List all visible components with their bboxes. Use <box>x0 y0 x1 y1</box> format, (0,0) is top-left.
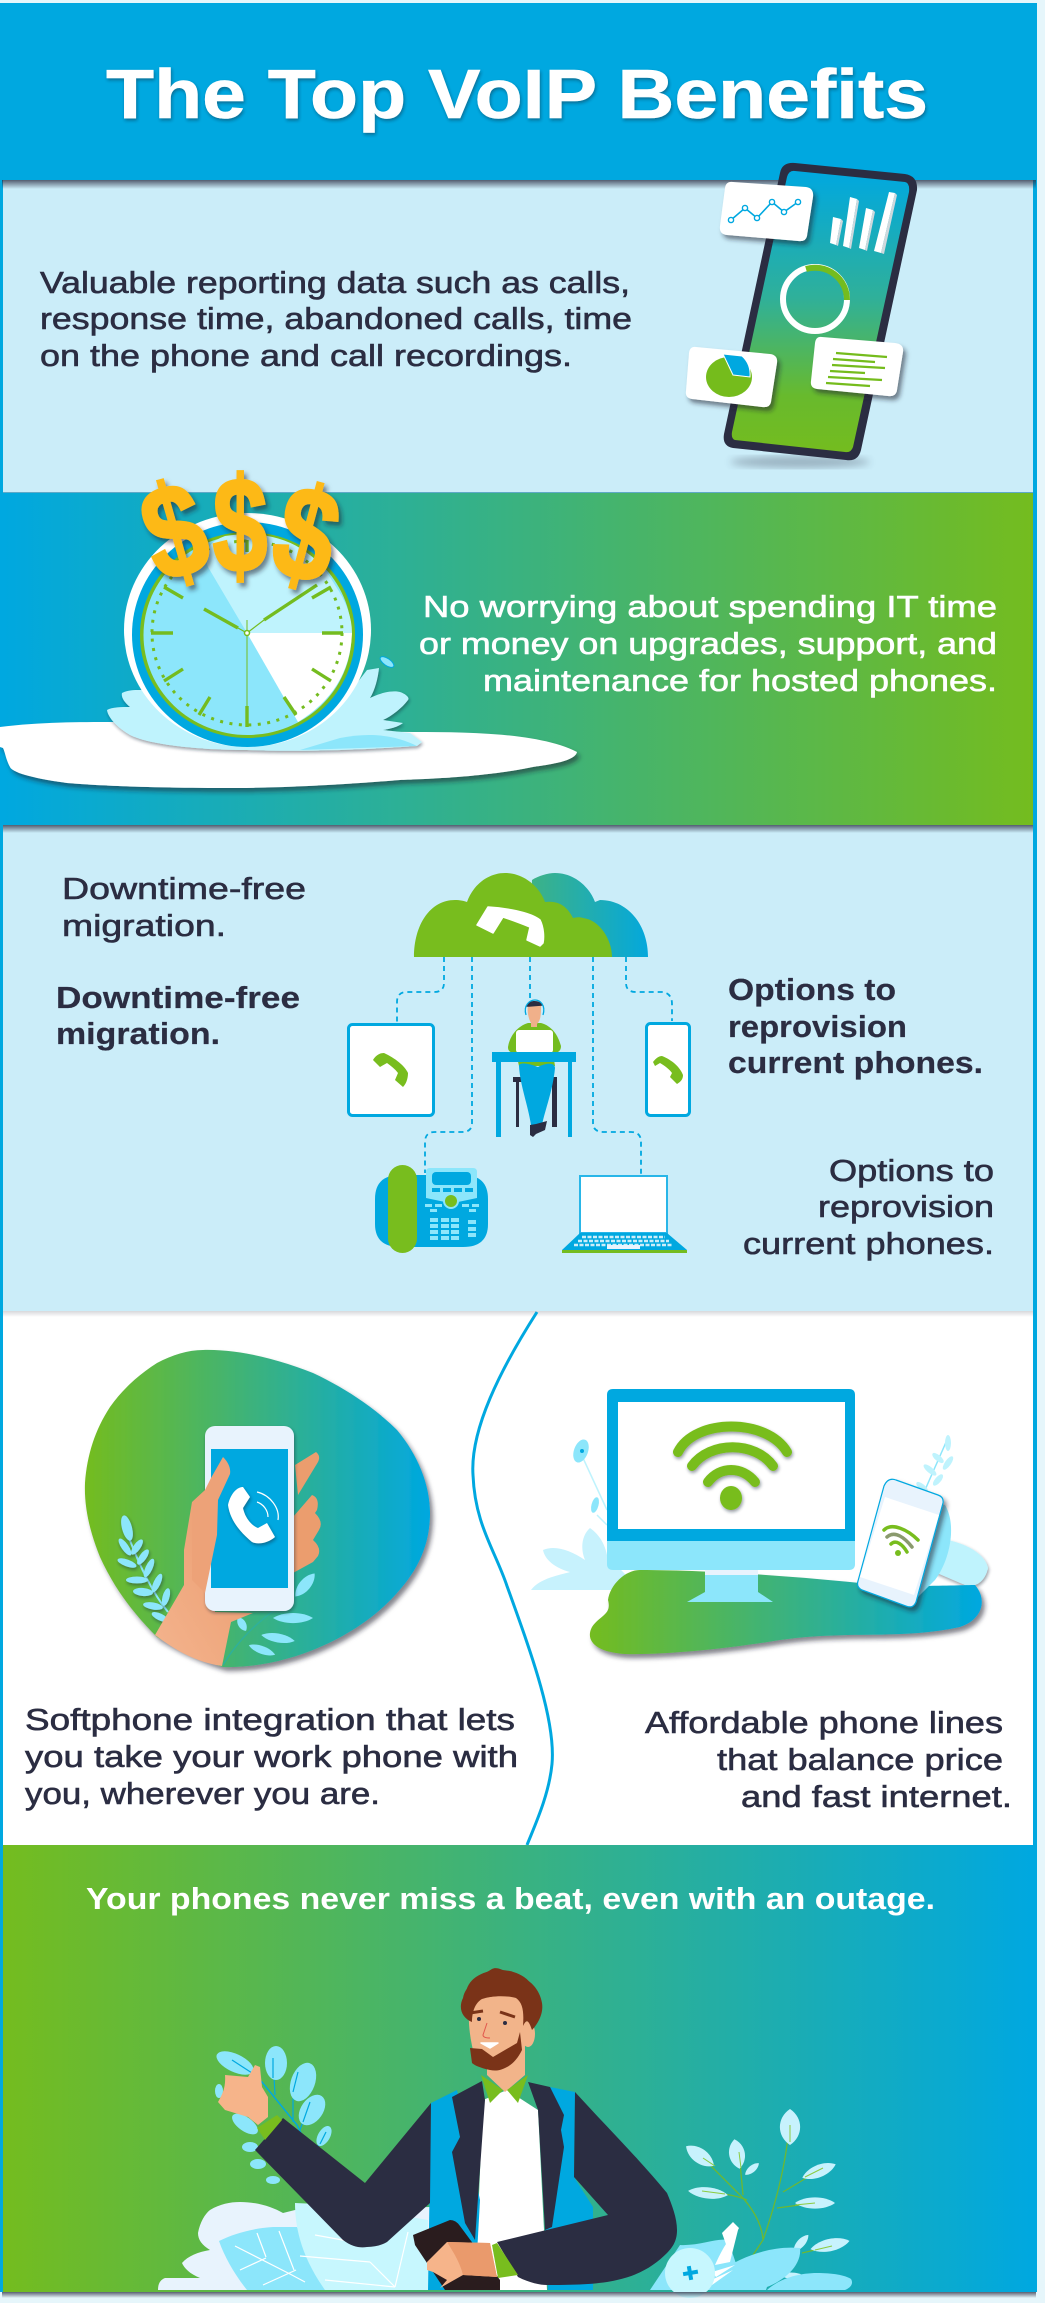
blue leaf <box>219 2227 325 2290</box>
nose <box>483 2023 490 2038</box>
dashed connectors <box>397 957 672 1175</box>
collar <box>481 2075 528 2103</box>
white spikes <box>709 2222 739 2285</box>
thumb <box>192 1457 230 1593</box>
laptop back <box>516 1030 553 1053</box>
options text regular: reprovision <box>818 1189 994 1224</box>
water splash <box>107 655 422 751</box>
reporting text: Valuable reporting data such as calls, <box>40 265 630 300</box>
dollar signs: $ <box>213 449 267 600</box>
reporting text <box>40 265 632 373</box>
held phone <box>413 2220 500 2290</box>
cloud handset <box>477 907 544 946</box>
hosted phones text <box>419 589 997 698</box>
shirt <box>475 2090 547 2290</box>
phone lines text: Affordable phone lines <box>645 1705 1003 1740</box>
face <box>469 1992 526 2067</box>
cloud <box>414 873 648 957</box>
hosted phones text: or money on upgrades, support, and <box>419 626 997 661</box>
desk phone <box>375 1165 488 1253</box>
softphone illustration <box>85 1350 430 1667</box>
top shadow <box>3 825 1033 833</box>
flower centre <box>683 2266 698 2280</box>
thumb up hand <box>218 2065 268 2125</box>
downtime text regular: Downtime-free <box>62 871 306 906</box>
softphone text: you, wherever you are. <box>25 1776 380 1811</box>
softphone text: you take your work phone with <box>25 1739 518 1774</box>
options text bold: current phones. <box>728 1045 983 1080</box>
phone screen <box>732 171 909 452</box>
wifi monitor illustration <box>531 1389 988 1654</box>
small leaf near base <box>780 2272 806 2280</box>
wifi symbol <box>678 1426 787 1510</box>
options text regular <box>743 1153 994 1261</box>
title: The Top VoIP Benefits <box>106 55 928 133</box>
clock <box>124 513 371 747</box>
phone with analytics cards <box>686 163 917 468</box>
desk <box>492 1052 576 1137</box>
phone body <box>724 163 917 460</box>
downtime text bold <box>56 980 300 1051</box>
water drop <box>378 655 396 669</box>
chair <box>513 1077 557 1127</box>
bottom shadow <box>2 2292 1036 2298</box>
neck <box>487 2040 525 2092</box>
line chart card <box>720 182 813 241</box>
legs <box>519 1063 555 1125</box>
hosted phones text: No worrying about spending IT time <box>423 589 997 624</box>
pie chart card <box>686 347 777 407</box>
dollar signs: $ <box>126 452 223 611</box>
panel: reporting data <box>3 180 1033 492</box>
bars <box>830 192 897 254</box>
reporting text: on the phone and call recordings. <box>40 338 572 373</box>
options text bold: Options to <box>728 972 896 1007</box>
mobile phone <box>646 1024 690 1116</box>
hosted phones text: maintenance for hosted phones. <box>483 663 997 698</box>
options text regular: Options to <box>829 1153 994 1188</box>
dollar signs: $ <box>259 456 354 613</box>
downtime text regular <box>62 871 306 943</box>
stems <box>702 2127 832 2255</box>
person at desk <box>492 1000 576 1137</box>
clock hands <box>204 585 317 727</box>
mobile handset <box>653 1056 683 1084</box>
foliage lobes <box>650 2240 745 2290</box>
smile <box>481 2043 498 2048</box>
left jacket arm <box>255 2103 431 2247</box>
man with thumbs up <box>218 1968 677 2290</box>
options text bold: reprovision <box>728 1009 907 1044</box>
hand fingers behind phone <box>293 1452 321 1573</box>
panel: migration and reprovisioning <box>3 825 1033 1311</box>
donut <box>783 267 847 331</box>
beard <box>470 2032 522 2071</box>
dots <box>152 541 342 725</box>
eyes and brows <box>477 2017 507 2025</box>
monitor <box>607 1389 855 1541</box>
plants left <box>158 2046 430 2290</box>
text lines card <box>811 337 903 396</box>
leaves <box>682 2109 851 2255</box>
pale leaf <box>295 2203 428 2290</box>
dollar signs <box>126 449 354 613</box>
torso <box>508 1023 561 1066</box>
options text regular: current phones. <box>743 1226 994 1261</box>
hour marks <box>151 540 343 727</box>
hair <box>461 1968 542 2030</box>
plants right <box>650 2109 852 2298</box>
tilted phone <box>858 1479 951 1607</box>
tablet <box>348 1024 434 1116</box>
title banner <box>2 3 1036 189</box>
phone lines text: that balance price <box>717 1742 1003 1777</box>
downtime text bold: migration. <box>56 1016 220 1051</box>
softphone text: Softphone integration that lets <box>25 1702 515 1737</box>
laptop <box>562 1176 687 1253</box>
downtime text regular: migration. <box>62 908 226 943</box>
clock light wedge <box>206 534 352 633</box>
background foliage <box>531 1528 640 1590</box>
reporting text: response time, abandoned calls, time <box>40 301 632 336</box>
phone screen <box>211 1449 288 1588</box>
panel: hosted phones <box>0 449 1033 825</box>
panel: softphone and phone lines <box>3 1311 1033 1845</box>
curved divider <box>473 1312 552 1845</box>
green blob <box>590 1570 982 1654</box>
phone lines text <box>645 1705 1012 1814</box>
right jacket arm <box>497 2092 677 2285</box>
palm <box>155 1500 253 1666</box>
right cuff <box>492 2243 518 2278</box>
tablet handset <box>373 1053 408 1087</box>
head and headset <box>528 1003 541 1027</box>
handset phone <box>205 1426 294 1611</box>
holding hand <box>427 2242 497 2288</box>
options text bold <box>728 972 983 1080</box>
outage text: Your phones never miss a beat, even with an outage. <box>86 1881 935 1916</box>
ear <box>521 2021 535 2047</box>
shoes <box>530 1121 547 1137</box>
foliage base <box>158 2202 430 2290</box>
softphone text <box>25 1702 518 1811</box>
leaves lower right <box>223 1570 319 1665</box>
flower <box>665 2248 715 2298</box>
monitor stand <box>687 1570 773 1602</box>
clock white wedge <box>247 633 352 722</box>
call icon <box>228 1487 278 1543</box>
jacket lapels <box>452 2081 564 2240</box>
left cuff <box>257 2115 282 2140</box>
white puddle <box>0 722 577 788</box>
branch left <box>213 2046 335 2184</box>
panel: outage resilience <box>3 1845 1033 2298</box>
fern <box>116 1514 172 1624</box>
hair backing <box>466 1970 534 2018</box>
downtime text bold: Downtime-free <box>56 980 300 1015</box>
blue vest <box>428 2087 593 2290</box>
blob <box>85 1350 430 1667</box>
phone lines text: and fast internet. <box>741 1779 1012 1814</box>
phone wifi <box>884 1527 918 1556</box>
